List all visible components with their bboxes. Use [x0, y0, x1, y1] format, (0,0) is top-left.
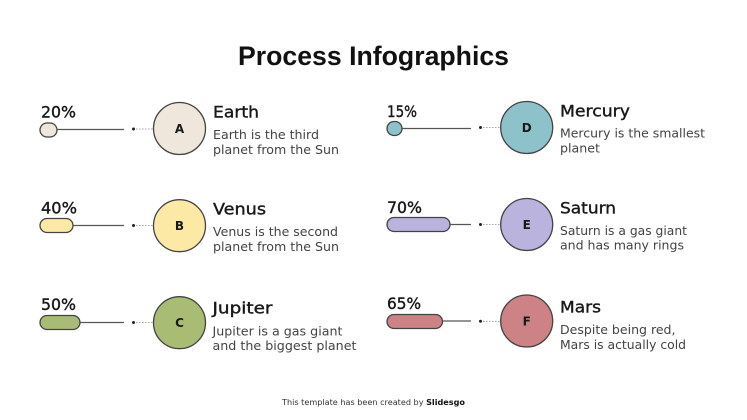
connector: Jupiter: [80, 321, 153, 324]
description: Earth: planet from the Sun: [213, 143, 339, 157]
heading: Mercury: Mercury: [560, 102, 630, 120]
circle: B: [154, 200, 206, 252]
description: Earth: Earth is the third: [213, 128, 319, 142]
circle: F: [501, 295, 553, 347]
percentage: 40%: 40%: [41, 198, 77, 218]
item: Jupiter: [40, 295, 357, 353]
description: Mars: Despite being red,: [560, 323, 676, 337]
description: Saturn: Saturn is a gas giant: [560, 224, 687, 238]
heading: Mars: Mars: [560, 298, 601, 316]
bar: Jupiter: [40, 316, 80, 330]
bar: Mercury: [387, 122, 402, 136]
description: Jupiter: Jupiter is a gas giant: [211, 324, 343, 338]
description: Mars: Mars is actually cold: [560, 338, 686, 352]
percentage: 70%: 70%: [387, 198, 422, 217]
circle: B: B: [175, 219, 184, 233]
circle: E: [501, 198, 553, 250]
item: Saturn: [387, 198, 687, 252]
circle: C: [154, 297, 206, 349]
heading: Earth: Earth: [213, 102, 259, 122]
item: Mercury: [387, 102, 705, 156]
circle: E: E: [523, 218, 531, 232]
heading: Jupiter: Jupiter: [211, 298, 273, 318]
percentage: 15%: 15%: [387, 102, 417, 121]
connector: Mercury: [402, 126, 500, 129]
description: Mercury: planet: [560, 142, 600, 156]
percentage: 65%: 65%: [387, 294, 421, 313]
item: Mars: [387, 294, 686, 352]
percentage: 20%: 20%: [41, 102, 76, 122]
description: Saturn: and has many rings: [560, 238, 684, 252]
bar: Earth: [40, 123, 57, 137]
percentage: 50%: 50%: [41, 295, 76, 314]
circle: A: A: [175, 122, 185, 136]
description: Mercury: Mercury is the smallest: [560, 126, 705, 140]
description: Jupiter: and the biggest planet: [212, 339, 357, 353]
bar: Mars: [387, 314, 442, 328]
bar: Venus: [40, 218, 73, 232]
item: Earth: [40, 102, 339, 157]
circle: F: F: [523, 314, 531, 328]
connector: Venus: [73, 224, 153, 227]
connector: Earth: [57, 128, 153, 130]
connector: Saturn: [450, 223, 500, 226]
heading: Venus: Venus: [213, 200, 266, 218]
footer credit: This template has been created by Slidesgo: [281, 398, 465, 407]
bar: Saturn: [387, 218, 450, 232]
description: Venus: planet from the Sun: [213, 240, 339, 254]
circle: D: [501, 102, 553, 154]
circle: C: C: [175, 316, 184, 330]
title: Process Infographics: [238, 41, 509, 71]
item: Venus: [40, 198, 339, 254]
heading: Saturn: Saturn: [560, 198, 616, 218]
connector: Mars: [442, 320, 500, 323]
description: Venus: Venus is the second: [213, 225, 338, 239]
circle: A: [154, 102, 206, 154]
circle: D: D: [522, 121, 532, 135]
